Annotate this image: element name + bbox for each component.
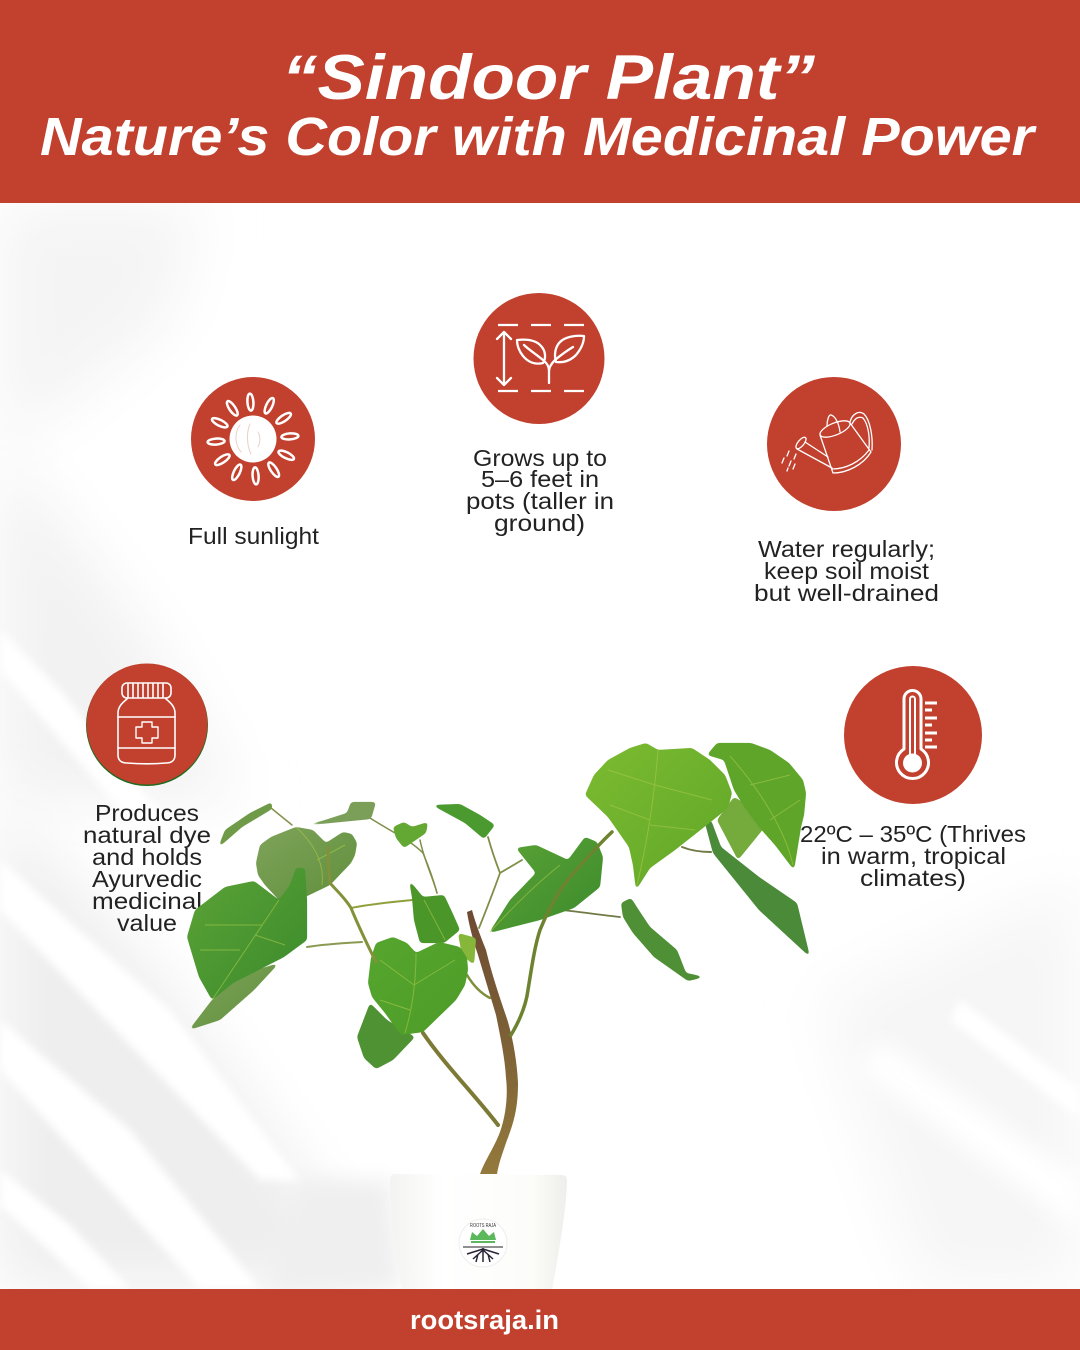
leaf: pale heart [256,827,357,900]
feature: full sunlight [188,377,320,549]
caption: Water regularly; [758,536,935,562]
caption [83,800,211,936]
leaf: centre heart [368,937,468,1035]
caption: 22ºC – 35ºC (Thrives [800,821,1026,847]
leaf: centre yellowish [458,933,476,965]
leaf: middle right [489,837,603,933]
caption: medicinal [92,888,202,914]
leaf: big top [585,743,732,890]
title: “Sindoor Plant” [282,43,816,113]
feature: height [466,293,614,536]
leaf: small heart [393,822,428,848]
leaf: top right [707,743,806,870]
stems over leaves [328,832,612,1035]
leaf: under left [189,963,279,1030]
leaf: right hanging long [705,820,810,957]
leaf: right hanging small [621,898,705,981]
caption [800,821,1026,891]
title: Nature’s Color with Medicinal Power [40,107,1037,167]
trunk [467,910,518,1174]
feature: temperature [800,666,1026,891]
stems behind leaves [271,808,711,1125]
pot logo: Roots Raja [459,1219,507,1267]
caption [754,536,939,606]
leaf: top centre [432,804,495,839]
header band [0,0,1080,203]
caption: value [117,910,177,936]
leaf: top left wide [296,802,376,827]
icon: medicine jar [86,664,208,786]
icon: plant height [474,293,604,424]
feature: medicinal value [83,664,211,936]
caption: and holds [92,844,202,870]
leaf: pale right [717,797,764,860]
title [40,43,1037,167]
plant [187,743,810,1174]
leaf veins [200,750,800,1033]
footer band [0,1289,1080,1350]
feature: watering [754,377,939,606]
pot logo: Roots Raja: ROOTS RAJA [470,1223,497,1229]
caption: pots (taller in [466,488,614,514]
caption: Full sunlight [188,523,320,549]
caption: Grows up to [473,445,607,471]
icon: sun [191,377,315,501]
footer website: rootsraja.in [410,1305,559,1335]
caption: natural dye [83,822,211,848]
pot [390,1174,567,1290]
leaf: lower hidden [357,1003,415,1069]
caption: Produces [95,800,199,826]
caption: ground) [494,510,585,536]
icon: watering can [767,377,901,511]
caption: climates) [860,865,966,891]
leaf: top left small [218,802,272,848]
caption: keep soil moist [764,558,930,584]
caption: 5–6 feet in [481,466,599,492]
leaf: centre upper [409,880,460,943]
caption [466,445,614,536]
leaf: large left [187,868,307,1000]
caption: but well-drained [754,580,939,606]
caption: in warm, tropical [821,843,1006,869]
icon: thermometer [844,666,982,804]
caption: Ayurvedic [92,866,202,892]
